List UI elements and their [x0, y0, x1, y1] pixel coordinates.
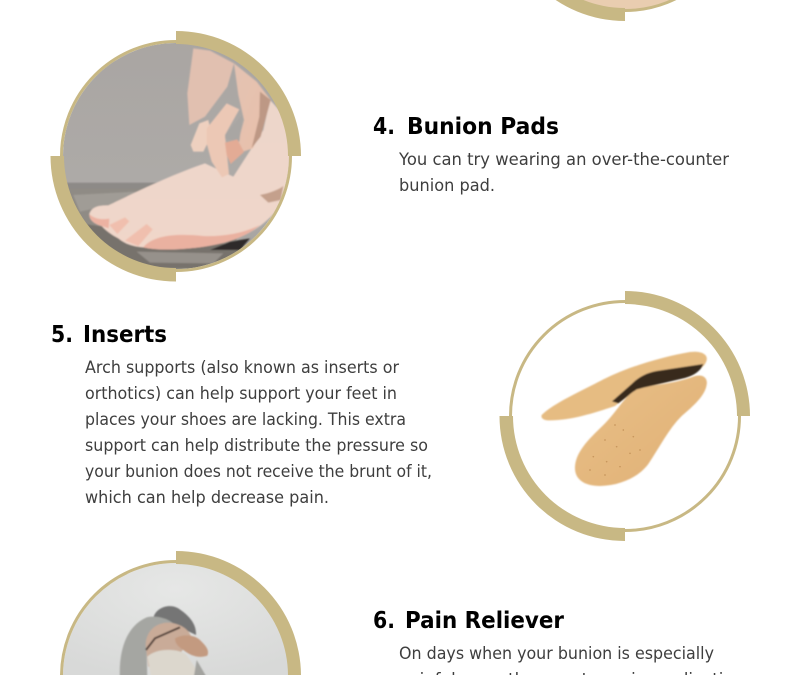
text block: bunion pads: bunion pad. [399, 176, 495, 195]
text block: inserts: orthotics) can help support your feet in [85, 384, 397, 403]
text block: inserts: Arch supports (also known as inserts or [85, 358, 399, 377]
text block: inserts: which can help decrease pain. [85, 488, 329, 507]
photo: hand touching foot [63, 43, 289, 269]
text block: inserts: support can help distribute the pressure so [85, 436, 428, 455]
text block: inserts: your bunion does not receive the brunt of it, [85, 462, 432, 481]
heading: 4. Bunion Pads: 4. [373, 114, 395, 140]
photo: older man with hand on face [63, 563, 288, 675]
heading: 5. Inserts [51, 322, 167, 348]
text block: bunion pads [398, 150, 729, 195]
heading: 6. Pain Reliever: 6. [373, 608, 395, 634]
ring and gold arcs [500, 291, 750, 541]
circle photo: partly cropped top image [500, 0, 740, 21]
heading: 5. Inserts: Inserts [83, 322, 167, 348]
heading: 5. Inserts: 5. [51, 322, 73, 348]
heading: 6. Pain Reliever: Pain Reliever [405, 608, 565, 634]
circle photo: man in pain [50, 550, 301, 675]
text block: pain reliever: On days when your bunion is especially [399, 644, 714, 663]
text block: inserts: places your shoes are lacking. This extra [85, 410, 406, 429]
ring and gold arcs [50, 31, 301, 282]
text block: pain reliever [399, 644, 744, 675]
circle photo: foot with bunion [50, 30, 301, 282]
photo: insoles [541, 352, 707, 486]
circle photo: arch support insoles [500, 291, 750, 541]
heading: 4. Bunion Pads: Bunion Pads [407, 114, 559, 140]
ring and gold arcs [62, 551, 301, 675]
text block: inserts [85, 358, 432, 507]
text block: bunion pads: You can try wearing an over-the-counter [398, 150, 729, 169]
